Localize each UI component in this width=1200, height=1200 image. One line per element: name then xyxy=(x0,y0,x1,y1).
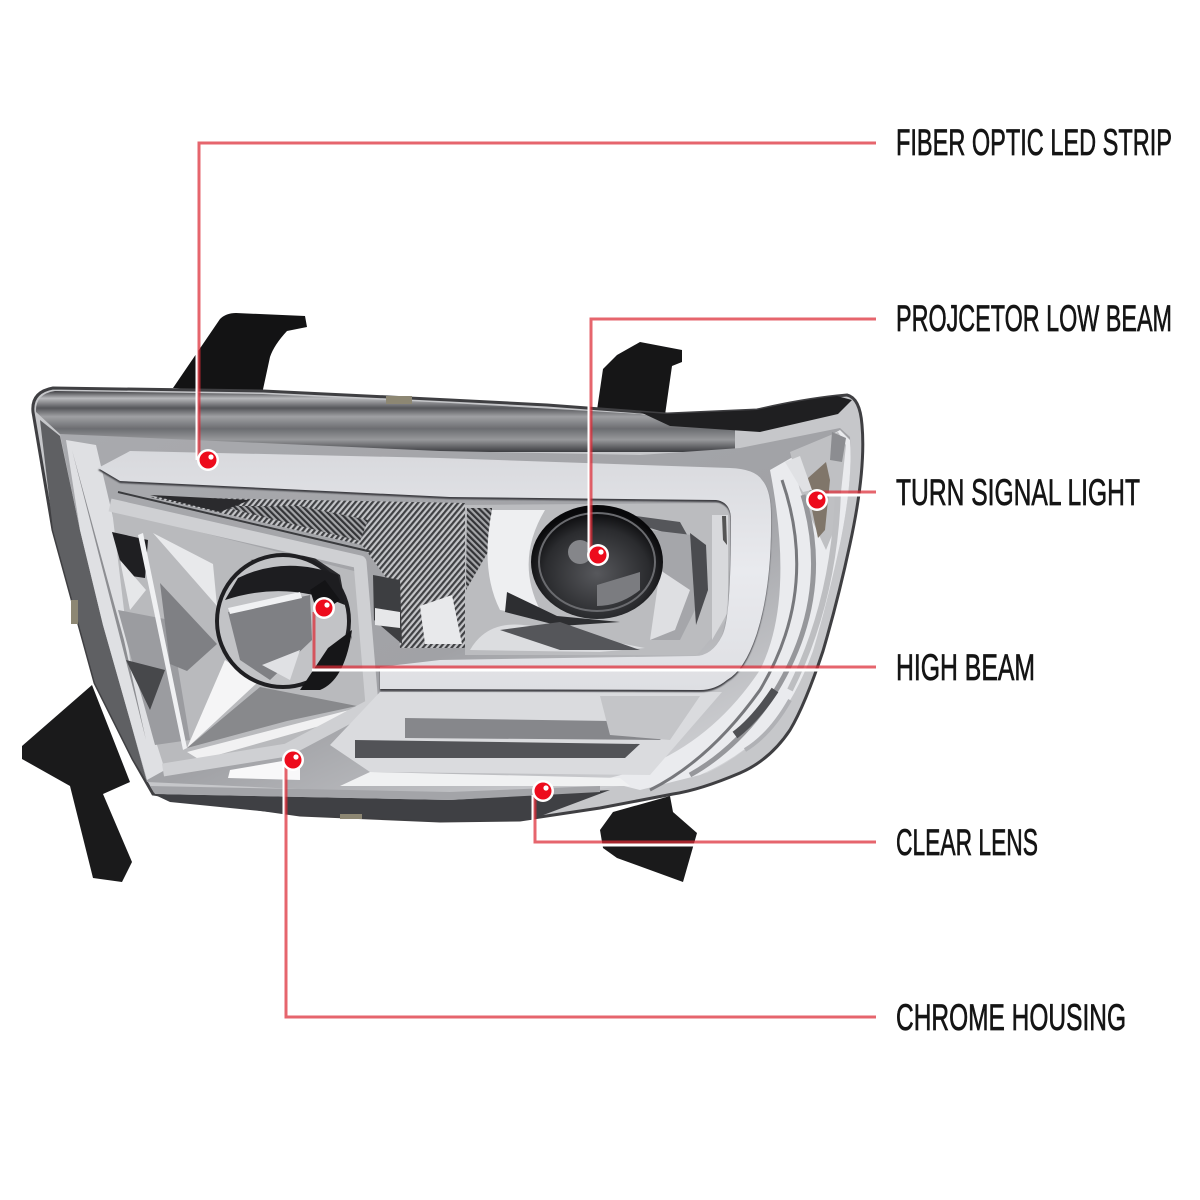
marker xyxy=(532,780,554,802)
high beam reflector xyxy=(112,510,372,770)
hatched reflector xyxy=(150,495,465,648)
label: CLEAR LENS xyxy=(896,822,1038,863)
bottom housing trim xyxy=(153,790,610,821)
callout: turn signal light xyxy=(806,472,1140,513)
callout: projector low beam xyxy=(587,298,1172,566)
callout: fiber optic LED strip xyxy=(197,122,1172,471)
housing clips xyxy=(71,396,412,819)
projector low beam module xyxy=(465,503,730,655)
right clear lens section xyxy=(600,430,851,790)
housing outer shell xyxy=(33,388,863,821)
mounting bracket: top left xyxy=(173,313,307,394)
left side dark rim xyxy=(40,420,147,782)
lower reflector section xyxy=(228,692,722,786)
top right dark trim xyxy=(640,396,852,432)
marker xyxy=(313,597,335,619)
callout: chrome housing xyxy=(282,749,1126,1038)
callout: high beam xyxy=(312,597,1035,688)
high beam lens xyxy=(217,555,349,687)
left inner chrome edge xyxy=(66,440,165,780)
chrome frame around high beam xyxy=(110,492,372,770)
marker xyxy=(587,544,609,566)
fiber optic LED strip xyxy=(98,451,771,692)
marker xyxy=(806,489,828,511)
mounting bracket: top right xyxy=(597,342,682,415)
marker xyxy=(282,749,304,771)
headlight assembly xyxy=(22,313,863,882)
top chrome band xyxy=(36,391,735,452)
turn signal reflector xyxy=(785,432,846,550)
label: HIGH BEAM xyxy=(896,647,1035,688)
callout: clear lens xyxy=(532,780,1038,863)
projector chrome surround xyxy=(465,503,730,655)
projector lens xyxy=(531,505,663,619)
mounting bracket: lower left xyxy=(22,685,132,882)
right curved chrome contours xyxy=(650,480,838,790)
inner lens area xyxy=(60,428,851,796)
marker xyxy=(197,449,219,471)
mounting bracket: lower right xyxy=(600,796,697,882)
